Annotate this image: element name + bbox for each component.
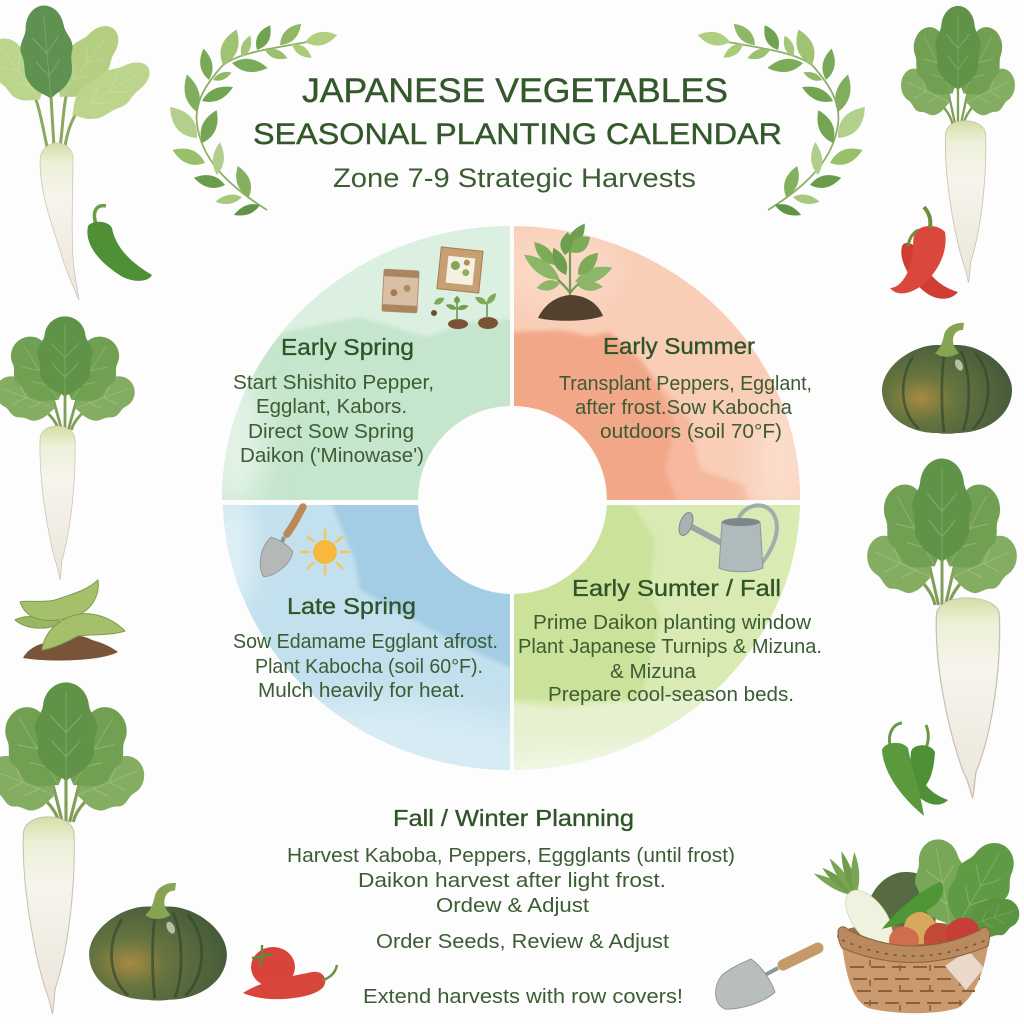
text: late spring tasks: Sow Edamame Egglant afrost. (233, 631, 498, 653)
title (253, 72, 782, 193)
icon: daikon top right (896, 6, 1020, 282)
heading: early summer: Early Summer (603, 333, 755, 359)
text block: fall / winter planning: Harvest Kaboba, Peppers, Eggglants (until frost) (287, 845, 735, 867)
title: Zone 7-9 Strategic Harvests (333, 163, 696, 193)
icon: kabocha bottom left (89, 883, 227, 1001)
text: early spring tasks (233, 372, 434, 467)
icon: plant in soil (520, 220, 615, 321)
title: SEASONAL PLANTING CALENDAR (253, 118, 782, 151)
text: early spring tasks: Egglant, Kabors. (256, 396, 407, 418)
icon: framed seed chart (437, 247, 483, 293)
text: early summer / fall tasks: Prime Daikon planting window (533, 612, 812, 634)
icon: daikon top left (0, 3, 158, 300)
text: late spring tasks: Mulch heavily for heat. (258, 680, 465, 702)
text block: fall / winter planning: Ordew & Adjust (436, 895, 589, 917)
icon: daikon left middle (0, 316, 141, 580)
panel: early spring (222, 226, 510, 500)
laurel branch: left (163, 20, 339, 219)
icon: sun (301, 530, 349, 574)
heading: late spring: Late Spring (287, 593, 416, 619)
text: early summer / fall tasks: Plant Japanese Turnips & Mizuna. (518, 636, 822, 658)
text: early summer tasks (559, 373, 812, 443)
title: JAPANESE VEGETABLES (302, 72, 728, 110)
text block: fall / winter planning: Fall / Winter Planning (393, 805, 634, 831)
text: late spring tasks (233, 631, 498, 702)
heading: early spring: Early Spring (281, 334, 414, 360)
text block: fall / winter planning: Extend harvests with row covers! (363, 986, 683, 1008)
panel: late spring (223, 503, 510, 770)
text: early spring tasks: Daikon ('Minowase') (240, 445, 424, 467)
text block: fall / winter planning (287, 805, 735, 1008)
panel: early summer (514, 224, 810, 500)
icon: daikon bottom left (0, 682, 151, 1014)
icon: edamame (15, 580, 125, 660)
icon: daikon right middle (860, 459, 1024, 798)
icon: tomato and red pepper (243, 945, 337, 999)
icon: seed packet (382, 269, 419, 313)
icon: kabocha right (882, 323, 1012, 434)
icon: garden trowel (716, 948, 818, 1009)
laurel branch: right (696, 20, 872, 219)
text block: fall / winter planning: Daikon harvest after light frost. (358, 870, 666, 892)
icon: vegetable basket (812, 831, 1024, 1013)
text: early summer / fall tasks: & Mizuna (610, 661, 697, 683)
text: early spring tasks: Direct Sow Spring (248, 421, 414, 443)
heading: early sumter / fall: Early Sumter / Fall (572, 575, 781, 601)
text block: fall / winter planning: Order Seeds, Review & Adjust (376, 931, 669, 953)
icon: red peppers (890, 207, 958, 299)
panel: early summer / fall (514, 503, 820, 770)
icon: trowel (260, 507, 303, 577)
text: early spring tasks: Start Shishito Pepper, (233, 372, 434, 394)
icon: green pepper left (87, 206, 152, 281)
icon: watering can (676, 505, 777, 572)
text: early summer / fall tasks: Prepare cool-season beds. (548, 684, 794, 706)
text: late spring tasks: Plant Kabocha (soil 60°F). (255, 656, 483, 678)
text: early summer / fall tasks (518, 612, 822, 706)
text: early summer tasks: Transplant Peppers, Egglant, (559, 373, 812, 395)
icon: green peppers right (882, 723, 948, 816)
icon: seedlings (431, 291, 498, 329)
text: early summer tasks: after frost.Sow Kabocha (575, 397, 793, 419)
text: early summer tasks: outdoors (soil 70°F) (600, 421, 782, 443)
